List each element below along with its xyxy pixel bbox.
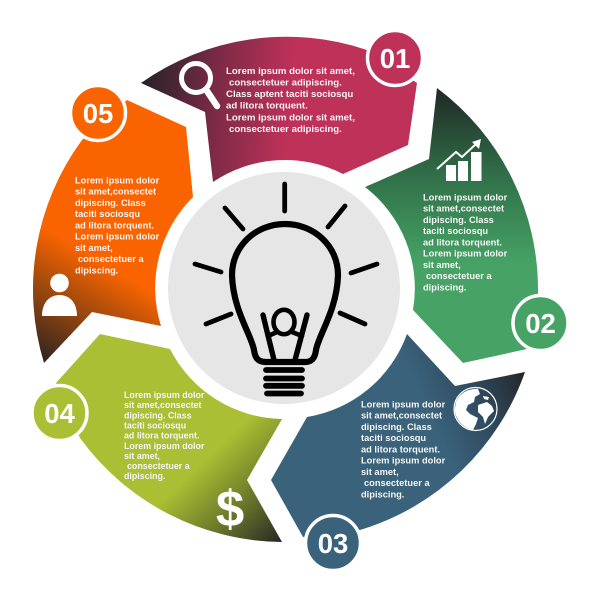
panel: segment 02	[365, 88, 568, 363]
text block 02: ad litora torquent.	[423, 238, 502, 248]
panel: segment 01	[141, 30, 422, 182]
text block 04: taciti sociosqu	[124, 420, 186, 430]
icon: dollar sign: $	[216, 480, 244, 537]
number badge 03: 03	[318, 528, 348, 559]
text block 01: Class aptent taciti sociosqu	[226, 89, 353, 100]
text block 04: consectetuer a	[127, 461, 190, 471]
number badge 04: 04	[44, 398, 75, 429]
text block 04: ad litora torquent.	[124, 431, 199, 441]
panel: segment 04	[32, 334, 282, 542]
number badge 01: 01	[380, 43, 410, 74]
text block 05: Lorem ipsum dolor	[75, 232, 160, 242]
text block 01: Lorem ipsum dolor sit amet,	[226, 66, 355, 77]
text block 03: taciti sociosqu	[361, 433, 426, 443]
text block 04: Lorem ipsum dolor	[124, 441, 205, 451]
text block 02: sit amet,consectet	[423, 204, 504, 214]
text block 03: consectetuer a	[364, 478, 430, 488]
text block 02: Lorem ipsum dolor	[423, 192, 508, 202]
segment 05 shape	[33, 100, 193, 363]
bulb rays	[195, 184, 377, 324]
icon: person	[42, 274, 77, 316]
number badge 02	[513, 296, 568, 350]
text block 02: consectetuer a	[426, 271, 492, 281]
text block 05: sit amet,consectet	[75, 187, 156, 197]
bulb outline	[232, 224, 338, 362]
segment 02 shape	[365, 88, 538, 363]
text block 03: sit amet,consectet	[361, 411, 442, 421]
panel: segment 03	[271, 334, 525, 570]
segment 01 shape	[141, 37, 417, 182]
text block 03: dipiscing. Class	[361, 422, 432, 432]
text block 03: ad litora torquent.	[361, 444, 440, 454]
icon: globe	[454, 388, 497, 430]
text block 05: dipiscing. Class	[75, 198, 146, 208]
number badge 04	[32, 386, 87, 440]
center circle	[168, 172, 400, 404]
text block 05: Lorem ipsum dolor	[75, 176, 160, 186]
text block 01: consectetuer adipiscing.	[229, 124, 342, 135]
panel: segment 05	[33, 86, 193, 363]
text block 03: Lorem ipsum dolor	[361, 456, 446, 466]
text block 02: taciti sociosqu	[423, 226, 488, 236]
text block 03: dipiscing.	[361, 490, 404, 500]
number badge 05: 05	[83, 98, 113, 129]
bulb base	[266, 370, 302, 394]
text block 03: sit amet,	[361, 467, 399, 477]
text block 04: Lorem ipsum dolor	[124, 390, 205, 400]
icon: light bulb	[195, 184, 377, 394]
number badge 01	[368, 30, 422, 86]
text block 02: dipiscing. Class	[423, 215, 494, 225]
text block 02: dipiscing.	[423, 282, 466, 292]
number badge 05	[70, 86, 126, 140]
text block 04: dipiscing. Class	[124, 410, 192, 420]
number badge 03	[306, 516, 360, 570]
segment 03 shape	[271, 334, 525, 537]
segment 04 shape	[56, 334, 282, 542]
text block 05: consectetuer a	[78, 254, 144, 264]
icon: growth chart	[437, 139, 482, 181]
text block 04: sit amet,	[124, 451, 160, 461]
text block 05: taciti sociosqu	[75, 209, 140, 219]
number badge 02: 02	[525, 308, 556, 339]
text block 05: sit amet,	[75, 243, 113, 253]
text block 04: dipiscing.	[124, 471, 165, 481]
text block 01: consectetuer adipiscing.	[229, 78, 342, 88]
text block 03: Lorem ipsum dolor	[361, 400, 446, 410]
text block 02: Lorem ipsum dolor	[423, 249, 508, 259]
text block 05: ad litora torquent.	[75, 220, 154, 230]
icon: magnifying glass	[182, 64, 217, 106]
text block 01: Lorem ipsum dolor sit amet,	[226, 112, 355, 123]
text block 04: sit amet,consectet	[124, 400, 201, 410]
text block 05: dipiscing.	[75, 266, 118, 276]
figure in bulb	[263, 310, 307, 360]
text block 02: sit amet,	[423, 260, 461, 270]
text block 01: ad litora torquent.	[226, 101, 308, 112]
